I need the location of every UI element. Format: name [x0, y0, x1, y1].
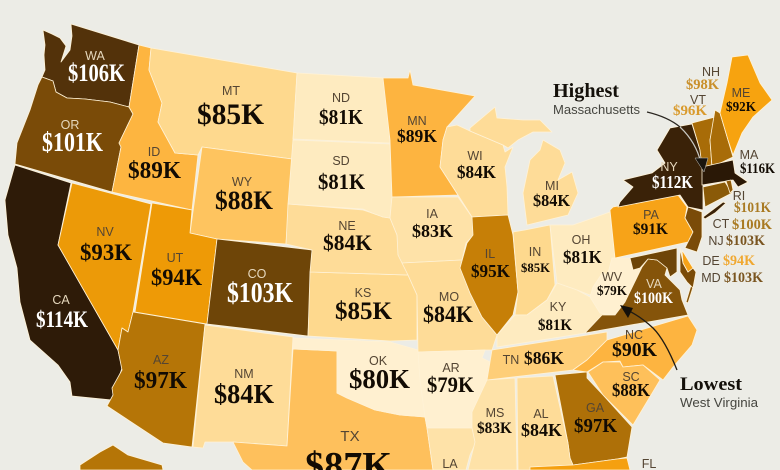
label: OR: OR: [61, 118, 79, 132]
label: UT: $94K: [151, 265, 202, 290]
label: ND: [319, 91, 364, 129]
label: DE: $94K: [723, 253, 755, 269]
label: AZ: [134, 353, 187, 394]
label: SD: [318, 154, 365, 194]
state shape: RI: [726, 180, 733, 193]
label: VT: [673, 93, 707, 119]
label: VT: $96K: [673, 103, 707, 119]
label: AL: [521, 407, 562, 440]
label: CT: [713, 217, 772, 233]
state shape: IA: [390, 197, 478, 263]
label: MI: [533, 179, 571, 210]
label: OR: $101K: [42, 127, 103, 157]
label: MS: [477, 406, 513, 437]
label: ME: $92K: [726, 100, 756, 115]
label: CT: CT: [713, 217, 730, 231]
label: NV: [80, 225, 132, 265]
label: OR: [42, 118, 103, 157]
state shape: ID: [112, 45, 198, 210]
label: CA: CA: [52, 293, 70, 307]
state shape: AL: [517, 376, 573, 470]
label: OK: $80K: [349, 364, 410, 394]
state shape: MS: [468, 378, 517, 470]
label: PA: PA: [643, 208, 660, 222]
state shape: MT: [149, 48, 297, 159]
label: KS: KS: [355, 286, 371, 300]
label: NJ: NJ: [708, 234, 724, 248]
state shape: KS: [308, 272, 417, 341]
label: IN: [521, 245, 551, 275]
label: KS: $85K: [335, 298, 393, 325]
label: AL: $84K: [521, 420, 562, 440]
state shape: NC: [573, 316, 697, 380]
label: MD: MD: [701, 271, 721, 285]
state shape: WI: [440, 125, 513, 217]
label: OK: OK: [369, 354, 388, 368]
label: OH: $81K: [563, 247, 602, 267]
label: IA: IA: [426, 207, 439, 221]
state shape: IN: [513, 225, 555, 315]
label: ID: $89K: [128, 158, 181, 184]
label: GA: GA: [586, 401, 605, 415]
label: MO: $84K: [423, 302, 473, 327]
label: MS: MS: [486, 406, 504, 420]
label: MO: [423, 290, 473, 327]
label: MT: MT: [222, 84, 240, 98]
label: NY: [652, 160, 693, 192]
label: ND: ND: [332, 91, 350, 105]
state shape: TX: [233, 349, 433, 470]
label: NE: [323, 219, 372, 255]
label: TX: [305, 428, 392, 470]
label: VT: VT: [690, 93, 706, 107]
label: CA: [36, 293, 88, 332]
state shape: VT: [692, 117, 715, 167]
label: OH: [563, 233, 602, 267]
label: ME: [726, 86, 756, 115]
state shape: CA: [5, 165, 122, 400]
label: ID: ID: [148, 145, 160, 159]
label: CO: $103K: [227, 278, 293, 309]
label: NM: $84K: [214, 379, 274, 409]
label: NY: NY: [660, 160, 678, 174]
state shape: CO: [207, 239, 312, 336]
label: NJ: [708, 233, 765, 249]
state shape: IL: [460, 215, 518, 335]
label: NC: NC: [625, 328, 643, 342]
callout: lowest: [680, 374, 758, 410]
state shape: Long Island: [703, 202, 726, 219]
label: AR: AR: [442, 361, 460, 375]
label: NH: NH: [702, 65, 720, 79]
state shape: MI lower: [523, 140, 578, 225]
callout: highest: [553, 80, 640, 117]
label: AR: $79K: [427, 372, 474, 397]
state shape: MA: [702, 160, 748, 187]
label: AZ: AZ: [153, 353, 169, 367]
state shape: GA: [555, 372, 632, 465]
label: NV: $93K: [80, 240, 132, 265]
state shape: WA: [42, 24, 139, 107]
label: MD: $103K: [724, 270, 763, 286]
state shape: KY: [497, 283, 612, 347]
label: AZ: $97K: [134, 368, 187, 394]
state shape: DE: [682, 250, 693, 272]
label: MA: $116K: [740, 161, 775, 177]
label: SC: $88K: [612, 380, 650, 400]
arrow: to West Virginia: [620, 305, 677, 370]
state shape: MO: [402, 260, 497, 352]
state shape: OH: [550, 212, 615, 295]
state shape: NY: [618, 124, 703, 210]
state shape: MI upper: [470, 107, 552, 148]
label: SC: SC: [622, 370, 640, 384]
label: AL: AL: [533, 407, 549, 421]
label: NY: $112K: [652, 172, 693, 192]
label: NH: [686, 65, 720, 93]
label: NE: $84K: [323, 230, 372, 255]
label: MO: MO: [439, 290, 459, 304]
state shape: WY: [190, 147, 292, 244]
callout: highest: Highest: [553, 80, 619, 102]
label: IL: $95K: [471, 261, 510, 281]
label: MI: $84K: [533, 191, 571, 210]
label: IA: $83K: [412, 221, 453, 241]
label: ME: ME: [732, 86, 750, 100]
state shape: AZ: [107, 312, 205, 447]
state shape: NV: [58, 183, 151, 350]
label: MN: MN: [407, 114, 427, 128]
label: SD: $81K: [318, 169, 365, 194]
label: WY: $88K: [215, 186, 274, 215]
label: IN: $85K: [521, 260, 551, 275]
state shape: VA eastern shore: [686, 282, 694, 303]
label: RI: $101K: [734, 200, 771, 216]
label: RI: [733, 189, 771, 216]
callout: lowest: West Virginia: [680, 396, 758, 410]
label: PA: [633, 208, 669, 238]
label: MD: [701, 270, 763, 286]
arrow: to Massachusetts: [647, 112, 708, 172]
state shape: MD west: [630, 248, 677, 277]
state shape: MN: [383, 70, 475, 197]
label: WY: WY: [232, 175, 253, 189]
label: MN: [397, 114, 437, 146]
label: NC: $90K: [612, 339, 657, 361]
label: CT: $100K: [732, 217, 772, 233]
label: NE: NE: [338, 219, 356, 233]
label: SD: SD: [332, 154, 350, 168]
label: MN: $89K: [397, 126, 437, 146]
label: GA: [574, 401, 617, 437]
state shape: NJ: [685, 207, 702, 252]
label: ID: [128, 145, 181, 184]
label: IL: [471, 247, 510, 281]
label: MA: MA: [740, 148, 759, 162]
label: KY: KY: [550, 300, 567, 314]
label: WA: [68, 49, 125, 87]
label: WA: WA: [85, 49, 105, 63]
label: MA: [740, 148, 775, 177]
state shape: OK: [293, 338, 425, 417]
state shape: OR: [15, 77, 133, 192]
state shape: CT: [703, 182, 732, 207]
state shape: PA: [610, 195, 693, 258]
label: SC: [612, 370, 650, 400]
state shape: AK: [80, 445, 163, 470]
label: KY: [538, 300, 573, 334]
state shape: AR: [418, 350, 490, 428]
state shape: ME: [720, 55, 772, 155]
label: WV: WV: [602, 270, 623, 284]
label: NH: $98K: [686, 77, 719, 93]
label: UT: UT: [167, 251, 184, 265]
label: TN: [503, 348, 564, 368]
label: TN: TN: [503, 353, 519, 367]
label: CA: $114K: [36, 307, 88, 332]
state shape: LA: [427, 428, 477, 470]
label: IA: [412, 207, 453, 241]
state shape: NH: [710, 110, 733, 167]
label: CO: CO: [248, 267, 267, 281]
state shape: MD east: [680, 248, 696, 288]
label: PA: $91K: [633, 221, 669, 238]
label: KS: [335, 286, 393, 325]
state shape: NM: [193, 325, 293, 448]
state shape: SC: [588, 362, 660, 425]
label: NV: NV: [96, 225, 114, 239]
state shape: UT: [135, 203, 217, 324]
state shape: NE: [286, 204, 408, 275]
label: WA: $106K: [68, 60, 125, 87]
state shape: SD: [288, 140, 392, 218]
label: KY: $81K: [538, 317, 573, 334]
label: VA: $100K: [634, 290, 673, 307]
state shape: TN: [487, 332, 607, 380]
label: ND: $81K: [319, 105, 364, 129]
state shape: VA: [585, 259, 688, 333]
label: IL: IL: [485, 247, 495, 261]
label: MT: $85K: [197, 98, 265, 131]
label: WV: [597, 270, 627, 299]
label: MT: [197, 84, 265, 131]
label: RI: RI: [733, 189, 745, 203]
state shape: WV: [590, 258, 648, 315]
label: TN: $86K: [524, 348, 564, 368]
label: WI: WI: [467, 149, 483, 163]
label: WI: $84K: [457, 162, 496, 182]
label: NC: [612, 328, 657, 361]
label: GA: $97K: [574, 415, 617, 437]
label: IN: IN: [529, 245, 541, 259]
label: AR: [427, 361, 474, 397]
label: OH: OH: [572, 233, 590, 247]
callout: lowest: Lowest: [680, 374, 743, 395]
label: DE: [702, 253, 755, 269]
state shape: FL: [530, 458, 630, 470]
label: WI: [457, 149, 496, 182]
label: DE: DE: [702, 254, 720, 268]
label: TX: TX: [340, 428, 360, 445]
label: NM: NM: [234, 367, 254, 381]
label: WV: $79K: [597, 284, 627, 299]
label: NJ: $103K: [726, 233, 765, 249]
label: MI: MI: [545, 179, 559, 193]
label: MS: $83K: [477, 420, 513, 437]
state shape: ND: [293, 73, 390, 143]
label: CO: [227, 267, 293, 309]
label: VA: [634, 277, 673, 307]
callout: highest: Massachusetts: [553, 103, 640, 117]
label: UT: [151, 251, 202, 290]
label: VA: VA: [646, 277, 663, 291]
